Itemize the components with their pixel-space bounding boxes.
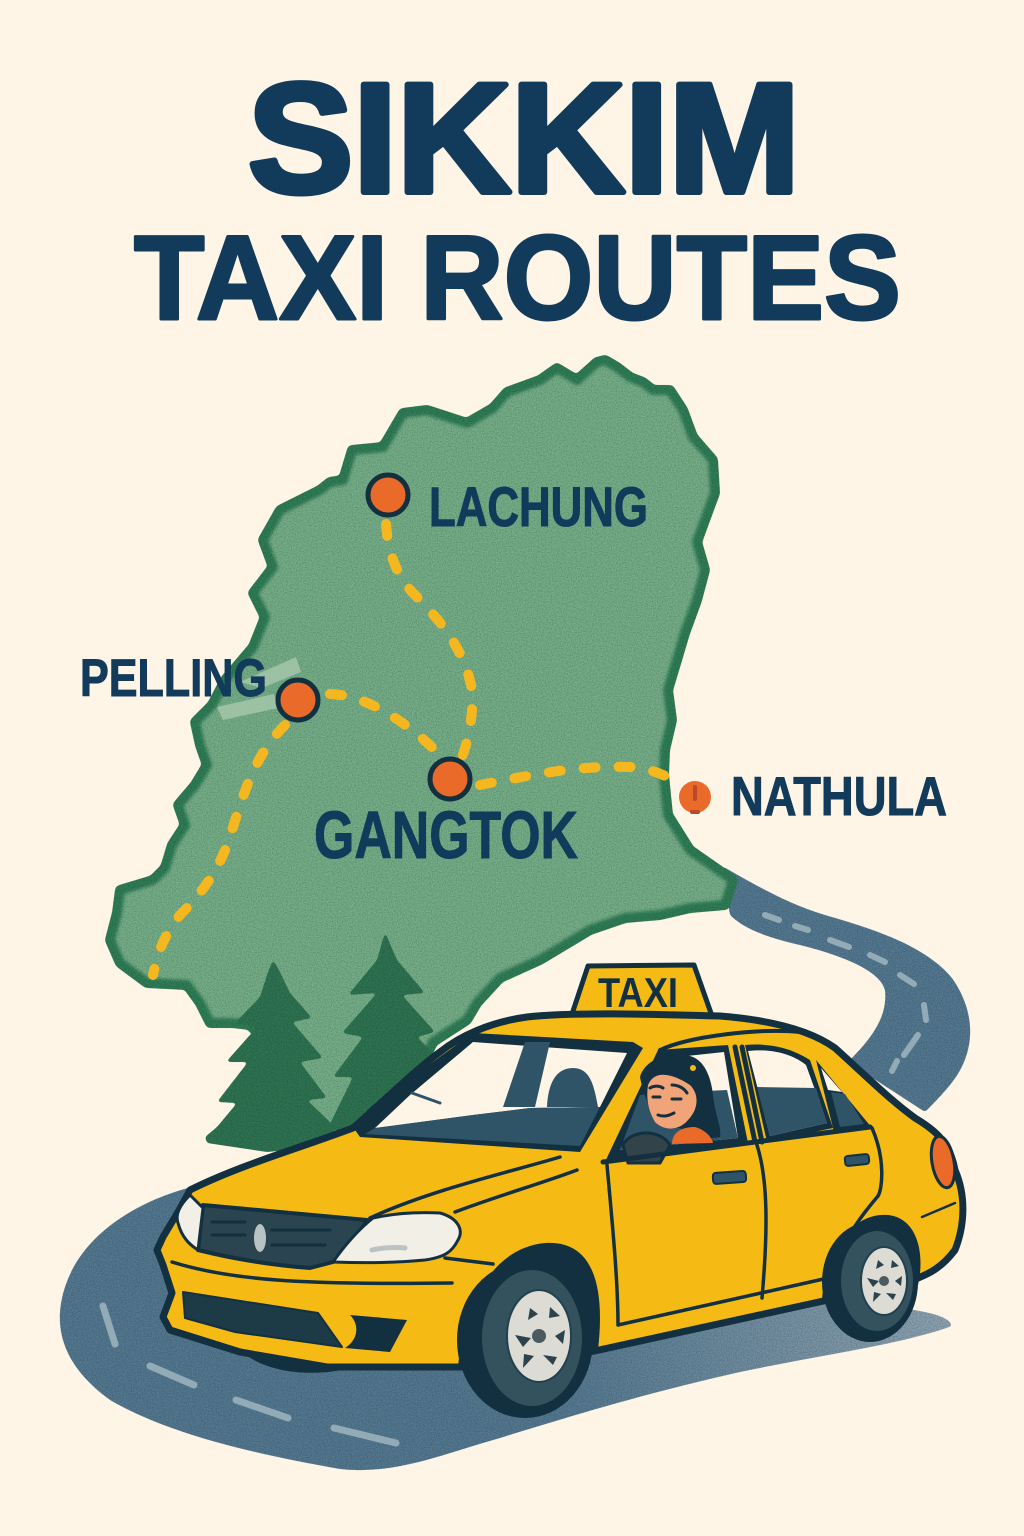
hair clip — [690, 1065, 696, 1071]
rear door window — [745, 1045, 833, 1142]
roof trim line — [660, 1031, 800, 1050]
road: upper winding segment — [722, 866, 970, 1112]
hood lines — [370, 1157, 577, 1218]
tree left — [205, 960, 340, 1152]
road: lower segment beneath taxi — [60, 1184, 952, 1470]
rear wheel — [822, 1215, 920, 1342]
driver — [623, 1054, 720, 1163]
driver face — [647, 1075, 697, 1129]
title line: Taxi Routes: TAXI ROUTES — [134, 211, 901, 345]
windshield — [353, 1033, 643, 1152]
title line: Sikkim: SIKKIM — [248, 52, 800, 226]
car body — [157, 1014, 963, 1367]
rear quarter window — [816, 1060, 872, 1132]
taxi — [157, 965, 963, 1418]
front wheel — [457, 1243, 600, 1418]
map of Sikkim — [110, 360, 733, 1140]
tape mark near Pelling — [217, 657, 301, 720]
door pillars and beltline — [603, 1047, 870, 1162]
rear-view post and seat — [503, 1042, 598, 1107]
headlight reflections — [372, 1247, 405, 1250]
driver eyes and mouth — [650, 1085, 687, 1116]
rear hubcap — [861, 1247, 907, 1315]
location marker: Nathula — [679, 781, 711, 813]
lower bumper intake — [183, 1292, 407, 1352]
tree right — [327, 932, 450, 1135]
title — [134, 52, 901, 345]
grille — [198, 1205, 367, 1268]
wiper — [412, 1093, 440, 1103]
pine trees — [205, 932, 450, 1152]
windshield glass — [375, 1042, 627, 1128]
front side window — [604, 1045, 748, 1164]
front hubcap — [507, 1290, 571, 1382]
label: Lachung: LACHUNG — [429, 475, 648, 538]
taxi roof sign — [572, 965, 712, 1016]
dashboard — [365, 1107, 600, 1146]
rear bumper line — [922, 1203, 955, 1217]
taxi roof sign: TAXI — [598, 969, 678, 1016]
left headlight — [177, 1195, 203, 1250]
under-car shadow and axle — [240, 1350, 370, 1373]
location marker: Lachung — [368, 475, 408, 515]
bumper line — [172, 1258, 493, 1283]
label: Pelling: PELLING — [80, 649, 267, 708]
label: Nathula: NATHULA — [731, 765, 947, 827]
location marker: Pelling — [278, 680, 318, 720]
windshield frame — [353, 1033, 643, 1152]
tail light — [928, 1134, 958, 1190]
side mirror — [623, 1133, 670, 1163]
location marker: Gangtok — [430, 759, 470, 799]
door handles — [713, 1154, 869, 1184]
right headlight — [333, 1213, 460, 1263]
door seams — [607, 1128, 882, 1325]
taxi routes (dashed) — [153, 524, 682, 975]
driver hair — [640, 1054, 720, 1140]
label: Gangtok: GANGTOK — [314, 798, 578, 873]
driver shirt — [672, 1127, 713, 1144]
